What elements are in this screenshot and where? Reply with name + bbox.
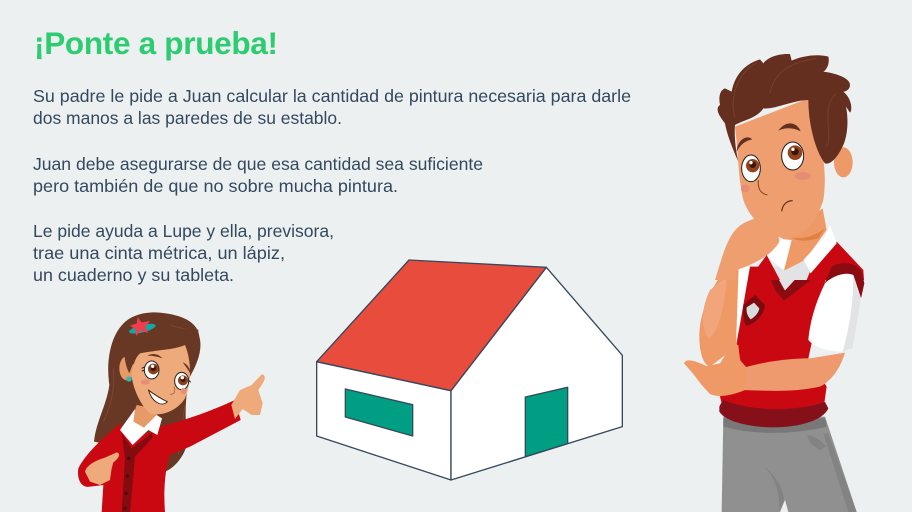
Juan left upper arm xyxy=(699,267,740,367)
text block: story: Juan debe asegurarse de que esa cantidad sea suficiente xyxy=(33,154,483,174)
Lupe fringe xyxy=(124,329,198,373)
text block: story xyxy=(33,86,631,285)
Lupe hair back xyxy=(94,312,200,472)
Lupe ear and earring xyxy=(119,356,134,382)
Juan body xyxy=(684,267,857,512)
Lupe cardigan placket xyxy=(122,433,153,512)
door xyxy=(525,387,568,457)
Juan trouser shading xyxy=(723,418,827,433)
Juan armhole trim xyxy=(823,263,864,298)
Juan sleeve xyxy=(808,263,864,352)
Lupe face xyxy=(132,345,190,414)
Juan hand xyxy=(684,344,747,396)
text block: story: trae una cinta métrica, un lápiz, xyxy=(33,243,285,263)
Lupe eyes xyxy=(142,361,191,390)
Juan vest xyxy=(720,267,828,410)
Juan badge xyxy=(743,295,765,326)
Lupe hair strands xyxy=(103,325,198,455)
Juan right eye xyxy=(782,142,804,170)
Lupe cheeks xyxy=(141,379,187,394)
house front wall xyxy=(317,362,451,480)
Juan neck xyxy=(778,208,827,272)
Juan thinking hand xyxy=(715,217,779,280)
Juan ear xyxy=(834,147,853,177)
Lupe smile xyxy=(149,390,167,404)
window xyxy=(345,389,413,436)
Juan sleeve cloth xyxy=(808,274,861,351)
Juan head xyxy=(715,54,864,280)
Juan shirt inner xyxy=(767,267,810,293)
Lupe hair clip xyxy=(128,317,156,336)
Juan vest shoulders xyxy=(748,242,864,280)
Juan forearm xyxy=(742,353,845,391)
Juan face xyxy=(735,98,825,239)
Juan trousers xyxy=(722,417,857,512)
Juan nose xyxy=(758,180,767,195)
title: ¡Ponte a prueba! xyxy=(34,25,278,61)
house illustration xyxy=(317,260,622,480)
text block: story: un cuaderno y su tableta. xyxy=(33,265,234,285)
Lupe eyebrows xyxy=(147,354,191,374)
Juan waistband xyxy=(719,401,828,427)
Juan hair xyxy=(718,54,851,164)
Juan sleeve shadow xyxy=(843,275,861,352)
Juan eyebrows xyxy=(737,123,801,152)
Juan collar xyxy=(767,225,837,273)
text block: story: pero también de que no sobre mucha pintura. xyxy=(33,176,398,196)
Juan mouth xyxy=(782,201,793,211)
Juan left eye xyxy=(742,155,760,182)
Lupe body cardigan xyxy=(78,400,241,512)
Juan hair strands xyxy=(733,58,837,147)
Lupe neck xyxy=(130,405,160,438)
Lupe nose xyxy=(170,387,175,394)
Lupe pointing hand xyxy=(231,374,265,419)
character: Lupe xyxy=(78,312,265,512)
Juan cheeks xyxy=(741,172,811,192)
Lupe lower hand xyxy=(85,452,119,485)
Juan vest neckline xyxy=(766,267,817,301)
text block: story: dos manos a las paredes de su establo. xyxy=(33,108,342,128)
text block: story: Le pide ayuda a Lupe y ella, previsora, xyxy=(33,221,334,241)
character: Juan xyxy=(684,54,864,512)
house gable wall xyxy=(451,267,622,480)
roof xyxy=(317,260,546,391)
Juan trouser folds xyxy=(764,433,857,512)
Lupe collar xyxy=(120,409,162,445)
text block: story: Su padre le pide a Juan calcular la cantidad de pintura necesaria para darle xyxy=(33,86,631,106)
Juan shirt side xyxy=(736,267,750,345)
